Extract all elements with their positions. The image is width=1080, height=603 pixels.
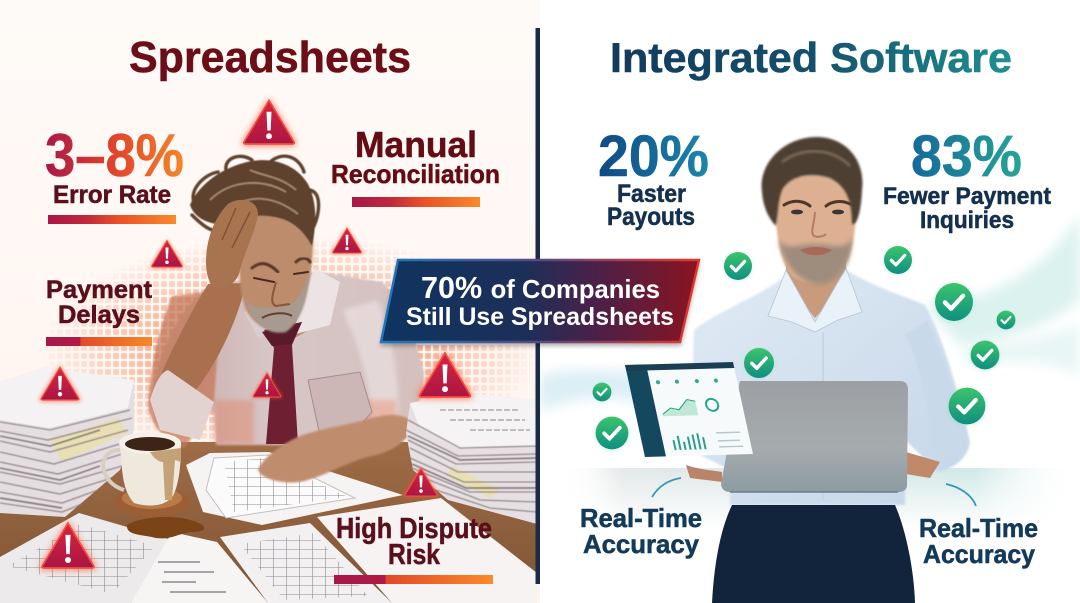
table <box>594 468 1038 518</box>
check icons <box>593 246 1015 450</box>
eyes and nose <box>784 201 850 206</box>
stat: real-time accuracy right: Accuracy <box>923 539 1036 569</box>
stat: manual reconciliation: Manual <box>355 124 477 165</box>
stat: real-time accuracy left <box>580 478 702 559</box>
stat: high dispute risk: Risk <box>388 539 441 571</box>
hand on head <box>206 200 258 289</box>
stat: 83% fewer payment inquiries: Inquiries <box>920 207 1014 234</box>
stat: real-time accuracy right: Real-Time <box>919 513 1038 543</box>
callout: 70% of companies: 70% of Companies <box>421 270 660 305</box>
paper stack left <box>0 367 134 517</box>
callout: 70% of companies: Still Use Spreadsheets <box>406 303 674 331</box>
beard <box>778 236 852 284</box>
smiling man <box>686 137 970 603</box>
arm raised <box>162 283 246 396</box>
stat: real-time accuracy left: Accuracy <box>583 529 700 559</box>
area chart <box>660 399 698 416</box>
neck and collar <box>252 292 318 345</box>
dashboard panel <box>625 362 753 457</box>
callout: 70% of companies <box>380 260 700 346</box>
laptop <box>721 381 908 492</box>
stat: high dispute risk: High Dispute <box>336 513 492 545</box>
stat: 20% faster payouts: Faster <box>617 180 686 208</box>
stat chips <box>655 379 718 384</box>
stat: 83% fewer payment inquiries <box>883 124 1051 234</box>
head <box>776 174 855 283</box>
teal swooshes <box>540 215 1080 412</box>
hair <box>762 137 862 226</box>
stat: manual reconciliation <box>331 124 500 207</box>
title: integrated software: Integrated Software <box>610 34 1012 81</box>
tie <box>264 322 302 444</box>
coffee cup <box>103 432 189 517</box>
stat: payment delays: Payment <box>46 276 153 304</box>
paper stack right <box>406 393 537 524</box>
stat: 83% fewer payment inquiries: 83% <box>911 124 1022 189</box>
desk <box>0 442 537 603</box>
stat: 3–8% error rate: 3–8% <box>45 122 184 189</box>
stat: 20% faster payouts <box>598 124 709 231</box>
panel: spreadsheets <box>0 0 540 603</box>
stat: 20% faster payouts: Payouts <box>607 203 695 231</box>
scattered papers <box>0 498 537 603</box>
warning icons <box>40 98 473 570</box>
bar chart <box>672 433 706 450</box>
stat: 3–8% error rate <box>45 122 184 224</box>
shirt pocket <box>308 372 372 436</box>
brow and eyes <box>252 258 310 272</box>
forearms on table <box>686 465 722 482</box>
title: spreadsheets: Spreadsheets <box>129 33 411 82</box>
head <box>238 209 313 330</box>
stat: high dispute risk <box>334 513 493 584</box>
stat: 3–8% error rate: Error Rate <box>53 181 171 209</box>
stat: payment delays <box>46 276 153 346</box>
orange grid backdrop <box>50 242 530 442</box>
center divider <box>536 28 540 584</box>
stat: payment delays: Delays <box>58 301 140 329</box>
stat: 83% fewer payment inquiries: Fewer Payment <box>883 183 1051 210</box>
messy hair <box>190 156 319 246</box>
beard <box>246 268 308 333</box>
resting hand and forearm <box>258 415 414 482</box>
stat: real-time accuracy right <box>919 484 1038 569</box>
stat: 20% faster payouts: 20% <box>598 124 709 189</box>
donut <box>705 399 719 411</box>
panel: integrated software <box>540 0 1080 603</box>
neck <box>786 250 846 318</box>
trousers <box>712 505 915 603</box>
paper spread center <box>186 452 403 525</box>
stat: manual reconciliation: Reconciliation <box>331 159 500 189</box>
coffee spill <box>127 517 204 538</box>
collar <box>768 268 862 332</box>
stat: real-time accuracy left: Real-Time <box>580 503 702 533</box>
frustrated man <box>148 156 424 448</box>
